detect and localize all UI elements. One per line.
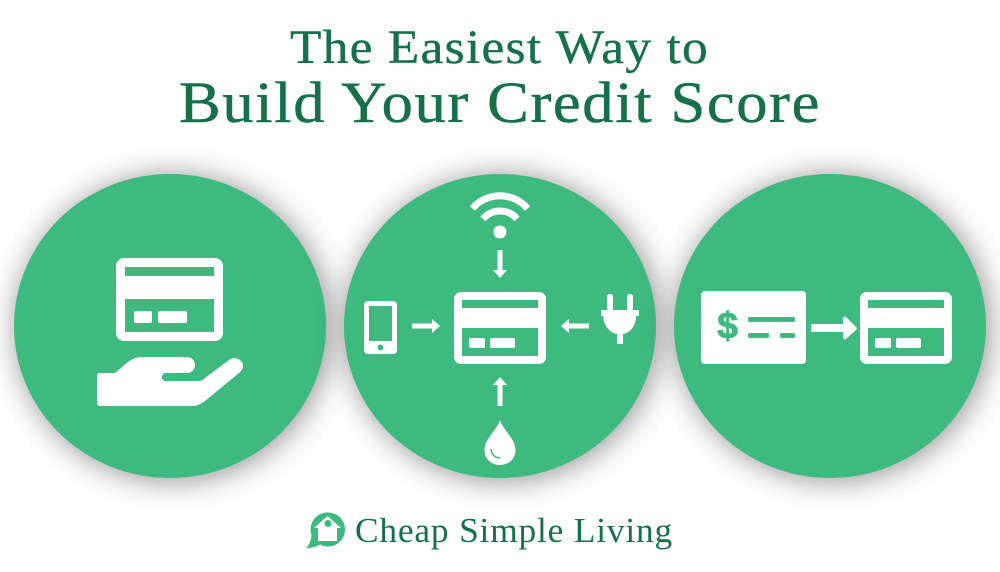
icon: phone [364, 301, 397, 354]
title line 2: Build Your Credit Score [179, 70, 821, 135]
footer logo [306, 511, 673, 550]
circle shadow [346, 175, 660, 481]
icon: check with dollar sign [701, 291, 806, 364]
icon: check with dollar sign: $ [717, 305, 738, 346]
title line 1: The Easiest Way to [290, 21, 709, 74]
title [179, 21, 821, 135]
arrow: check to card [811, 317, 857, 339]
green circle [14, 174, 326, 478]
circle shadow [676, 175, 990, 481]
icon: house speech bubble [306, 512, 345, 548]
arrow: left from plug [561, 319, 589, 333]
arrow: down from wifi [493, 250, 507, 278]
panel: bills to credit card [344, 174, 660, 481]
green circle [674, 174, 986, 478]
icon: credit card [116, 258, 223, 341]
icon: open hand [97, 357, 243, 406]
brand name: Cheap Simple Living [355, 511, 673, 550]
panel: check to credit card [674, 174, 990, 481]
icon: credit card [454, 292, 546, 364]
circle shadow [16, 175, 330, 481]
icon: credit card [860, 292, 952, 364]
green circle [344, 174, 656, 478]
icon: wifi [472, 196, 528, 238]
arrow: right from phone [412, 319, 440, 333]
icon: water drop [484, 420, 516, 465]
icon: plug [601, 294, 639, 344]
panel: receive a credit card [14, 174, 330, 481]
arrow: up from water [493, 377, 507, 406]
